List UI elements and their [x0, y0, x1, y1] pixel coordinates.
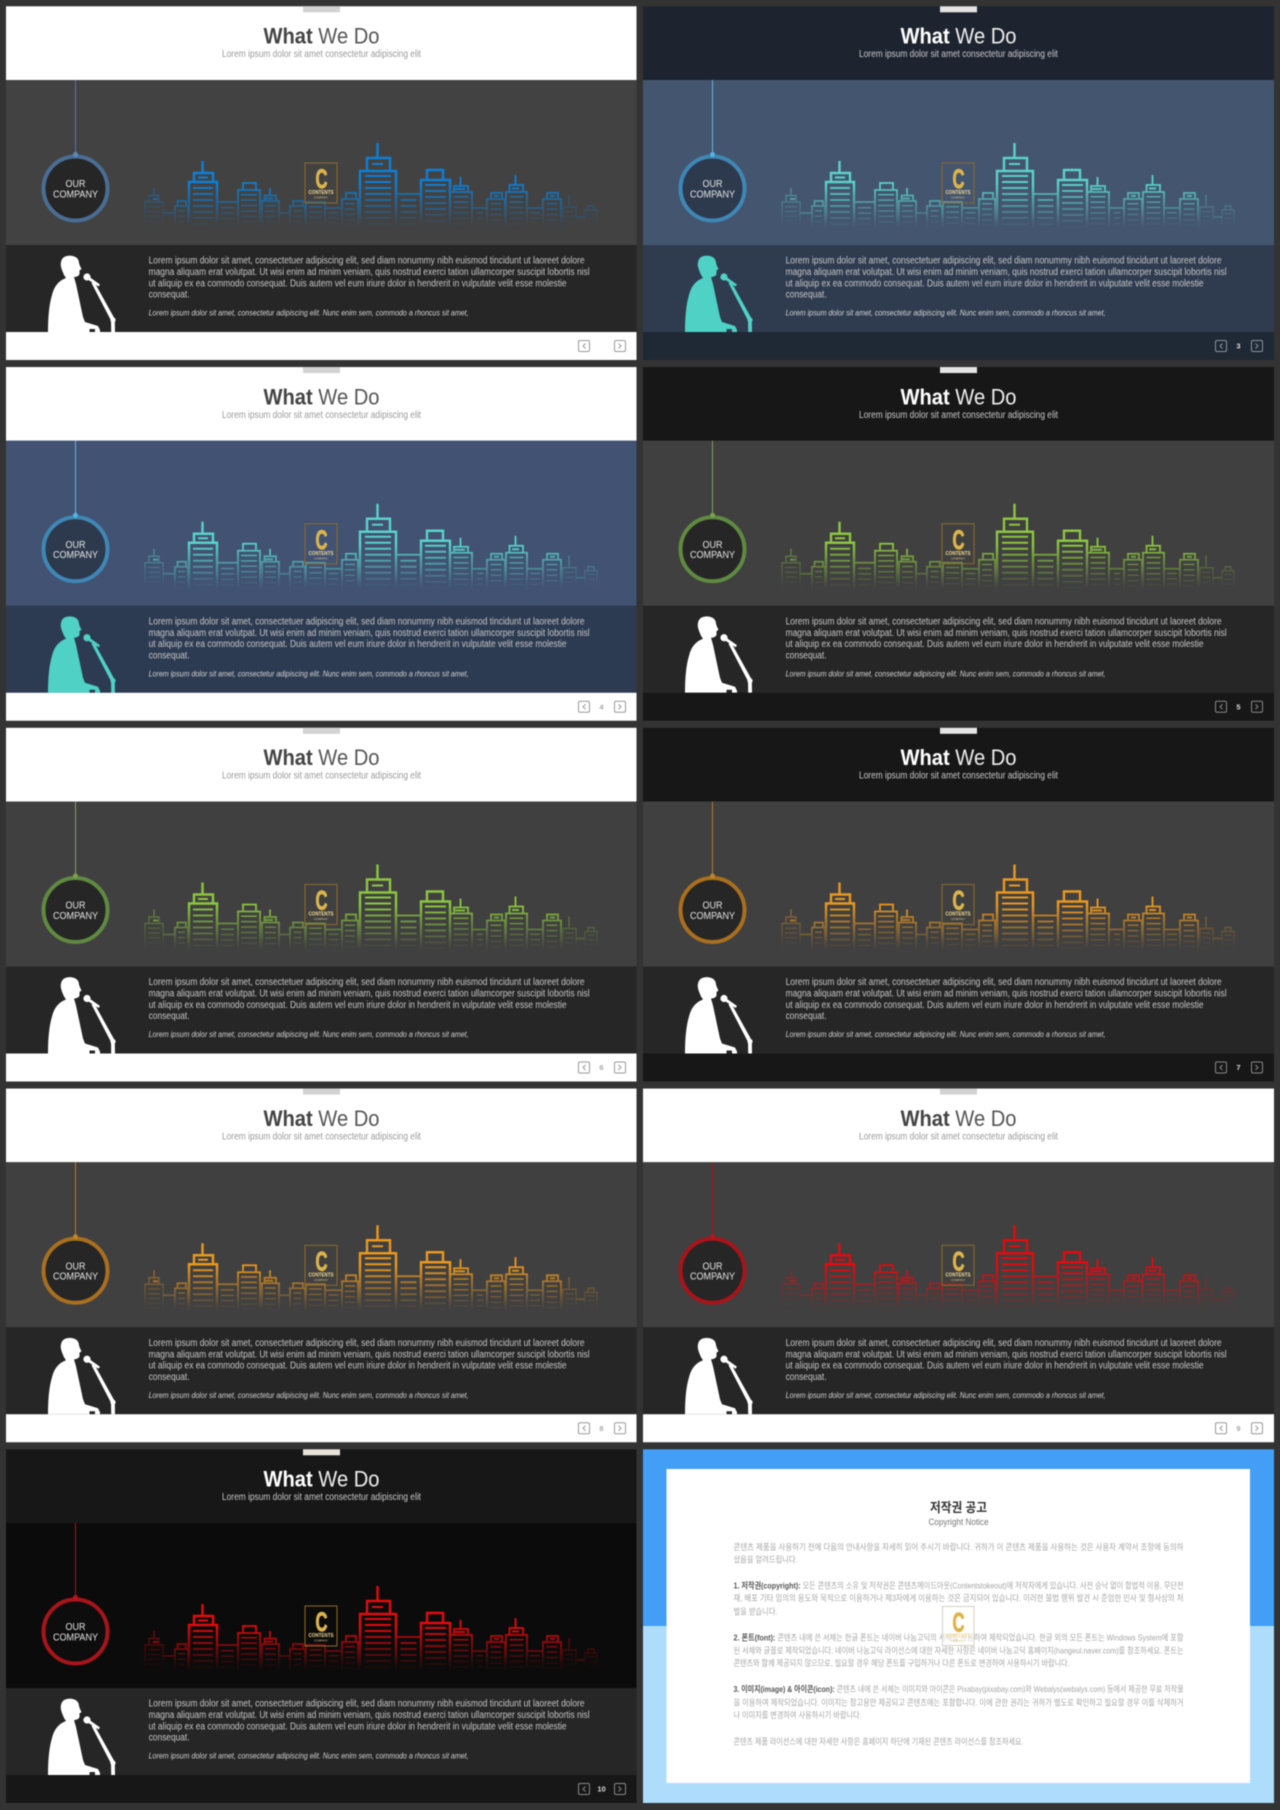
logo: CONTENTS [308, 551, 334, 557]
body text [786, 977, 1227, 1039]
watermark logo: C [952, 1608, 964, 1638]
body text: magna aliquam erat volutpat. Ut wisi enim ad minim veniam, quis nostrud exerci tation ullamcorper suscipit lobortis nisl [149, 1349, 590, 1360]
our company pendant [44, 1162, 108, 1303]
pager: 6 [599, 1063, 604, 1072]
subtitle: Lorem ipsum dolor sit amet consectetur adipiscing elit [222, 1492, 421, 1503]
white notice card [666, 1469, 1250, 1783]
paragraph 2: font: 2. 폰트(font): 콘텐츠 내에 쓴 서체는 한글 폰트는 네이버 나눔고딕의 서체를 사용하여 제작되었습니다. 한글 외의 모든 폰트는 Windows System에 포함 [734, 1633, 1184, 1643]
our company pendant: COMPANY [690, 550, 735, 561]
text band [6, 245, 636, 332]
body text: ut aliquip ex ea commodo consequat. Duis autem vel eum iriure dolor in hendrerit in vulputate velit esse molestie [786, 278, 1204, 289]
our company pendant [680, 1162, 744, 1303]
paragraph 1: copyright: 재, 배포 기타 임의의 용도와 목적으로 이용하거나 제3자에게 이용하는 것은 금지되어 있습니다. 이러한 불법 행위 발견 시 준엄한 민사 및 형사상의 처 [734, 1593, 1184, 1603]
logo [942, 524, 974, 564]
blue background upper [643, 1449, 1274, 1626]
body text: Lorem ipsum dolor sit amet, consectetur adipiscing elit. Nunc enim sem, commodo a rhoncus sit amet, [149, 668, 469, 678]
body text: magna aliquam erat volutpat. Ut wisi enim ad minim veniam, quis nostrud exerci tation ullamcorper suscipit lobortis nisl [149, 267, 590, 278]
speaker silhouette [48, 616, 116, 693]
logo: COMPANY [951, 196, 965, 200]
our company pendant [44, 80, 108, 220]
logo: C [316, 1246, 328, 1276]
title: What We Do [264, 1466, 380, 1492]
city band [6, 1162, 636, 1327]
skyline [782, 143, 1234, 232]
our company pendant: OUR [702, 1261, 722, 1272]
our company pendant: OUR [702, 540, 722, 551]
text band [643, 606, 1274, 693]
pager [578, 1784, 626, 1794]
watermark logo [942, 1606, 974, 1646]
our company pendant: COMPANY [690, 1272, 735, 1283]
pager [578, 340, 626, 352]
body text: Lorem ipsum dolor sit amet, consectetur adipiscing elit. Nunc enim sem, commodo a rhoncus sit amet, [149, 1750, 469, 1760]
closing line: 콘텐츠 제품 라이선스에 대한 자세한 사항은 홈페이지 하단에 기재된 콘텐츠 라이선스를 참조하세요. [734, 1737, 1024, 1747]
city band [6, 802, 636, 966]
subtitle: Lorem ipsum dolor sit amet consectetur adipiscing elit [222, 49, 421, 60]
our company pendant [680, 80, 744, 220]
footer [643, 1414, 1274, 1442]
speaker silhouette [48, 1699, 116, 1775]
subtitle: Lorem ipsum dolor sit amet consectetur adipiscing elit [859, 770, 1058, 782]
body text [786, 256, 1227, 318]
city band [643, 441, 1274, 606]
paragraph 3: images and icons: 나 이미지를 변경하여 사용하시기 바랍니다. [734, 1710, 862, 1720]
our company pendant [44, 441, 108, 581]
subtitle: Lorem ipsum dolor sit amet consectetur adipiscing elit [859, 410, 1058, 421]
speaker silhouette [685, 1338, 753, 1414]
subtitle: Lorem ipsum dolor sit amet consectetur adipiscing elit [222, 770, 421, 782]
logo: COMPANY [951, 556, 965, 560]
speaker silhouette [685, 256, 753, 332]
our company pendant: OUR [66, 1261, 86, 1272]
notice subtitle: Copyright Notice [928, 1517, 988, 1527]
pager [578, 701, 626, 712]
paragraph 1: copyright: 벌을 받습니다. [734, 1607, 778, 1617]
our company pendant: COMPANY [690, 189, 735, 200]
logo [942, 884, 974, 924]
logo: COMPANY [951, 1278, 965, 1282]
pager [1216, 1062, 1262, 1073]
body text: ut aliquip ex ea commodo consequat. Duis autem vel eum iriure dolor in hendrerit in vulputate velit esse molestie [149, 639, 567, 650]
footer [6, 1414, 636, 1442]
city band [6, 1523, 636, 1688]
title: What We Do [900, 24, 1016, 48]
logo: CONTENTS [946, 1272, 971, 1278]
logo: C [952, 1246, 964, 1276]
body text: consequat. [786, 1011, 827, 1022]
logo: COMPANY [314, 556, 328, 560]
footer [643, 693, 1274, 721]
text band [643, 1327, 1274, 1414]
city band [643, 1162, 1274, 1327]
pager: 7 [1236, 1063, 1241, 1072]
slide 5: green skyline on black header [643, 367, 1274, 721]
body text: consequat. [149, 1372, 190, 1383]
body text [149, 1338, 590, 1400]
logo: COMPANY [951, 917, 965, 921]
logo: CONTENTS [308, 1272, 334, 1278]
slide 7: orange skyline on black header [643, 728, 1274, 1082]
text band [6, 1327, 636, 1414]
skyline [145, 864, 597, 954]
logo: CONTENTS [946, 551, 971, 557]
subtitle: Lorem ipsum dolor sit amet consectetur adipiscing elit [859, 49, 1058, 60]
body text: consequat. [149, 290, 190, 301]
body text: ut aliquip ex ea commodo consequat. Duis autem vel eum iriure dolor in hendrerit in vulputate velit esse molestie [149, 1000, 567, 1011]
logo [942, 1245, 974, 1285]
text band [6, 1688, 636, 1775]
our company pendant: COMPANY [53, 911, 98, 922]
text band [6, 606, 636, 693]
slide 11: copyright notice [643, 1449, 1274, 1803]
city band [643, 802, 1274, 966]
body text: consequat. [786, 1372, 827, 1383]
city band [643, 80, 1274, 245]
body text: ut aliquip ex ea commodo consequat. Duis autem vel eum iriure dolor in hendrerit in vulputate velit esse molestie [149, 1721, 567, 1732]
logo: C [316, 164, 328, 194]
slide 8: orange skyline with white header [6, 1089, 636, 1442]
body text: magna aliquam erat volutpat. Ut wisi enim ad minim veniam, quis nostrud exerci tation ullamcorper suscipit lobortis nisl [149, 628, 590, 639]
logo: CONTENTS [308, 190, 334, 196]
our company pendant: OUR [66, 1622, 86, 1633]
paragraph 3: images and icons: 을 이용하여 제작되었습니다. 이미지는 참고용만 제공되고 콘텐츠에는 포함합니다. 이에 관한 권리는 귀하가 별도로 확인하고 필요할 경우 이를 삭제하거 [734, 1698, 1184, 1708]
body text: ut aliquip ex ea commodo consequat. Duis autem vel eum iriure dolor in hendrerit in vulputate velit esse molestie [786, 639, 1204, 650]
body text: ut aliquip ex ea commodo consequat. Duis autem vel eum iriure dolor in hendrerit in vulputate velit esse molestie [149, 1361, 567, 1372]
logo: C [316, 1607, 328, 1637]
slide 6: green skyline with white header [6, 728, 636, 1082]
header band [6, 6, 636, 80]
logo: COMPANY [314, 917, 328, 921]
pager: 8 [599, 1424, 604, 1433]
body text [149, 977, 590, 1039]
our company pendant: OUR [66, 900, 86, 912]
paragraph 3: images and icons: 3. 이미지(image) & 아이콘(icon): 콘텐츠 내에 쓴 서체는 이미지와 아이콘은 Pixabay(pixabay.com)와 Webalys(webalys.com) 등에서 제공한 무료 저작물 [734, 1684, 1184, 1694]
our company pendant [44, 802, 108, 942]
body text: consequat. [149, 1011, 190, 1022]
city band [6, 441, 636, 606]
skyline [145, 1225, 597, 1314]
header band [6, 728, 636, 802]
our company pendant: COMPANY [53, 189, 98, 200]
logo: CONTENTS [308, 1633, 334, 1639]
body text: Lorem ipsum dolor sit amet, consectetur adipiscing elit. Nunc enim sem, commodo a rhoncus sit amet, [786, 308, 1106, 318]
body text: Lorem ipsum dolor sit amet, consectetuer adipiscing elit, sed diam nonummy nibh euismod tincidunt ut laoreet dolore [149, 616, 585, 627]
paragraph 3: images and icons [734, 1684, 1184, 1720]
text band [643, 245, 1274, 332]
notice title: 저작권 공고 [930, 1500, 987, 1515]
logo [305, 884, 337, 924]
title: What We Do [900, 1106, 1016, 1131]
pager [1216, 1423, 1262, 1434]
title: What We Do [264, 24, 380, 48]
logo [942, 163, 974, 203]
footer [6, 332, 636, 360]
skyline [145, 1586, 597, 1675]
body text [149, 616, 590, 678]
title: What We Do [264, 384, 380, 409]
body text: ut aliquip ex ea commodo consequat. Duis autem vel eum iriure dolor in hendrerit in vulputate velit esse molestie [149, 278, 567, 289]
pager [1216, 701, 1262, 712]
body text [149, 1699, 590, 1760]
subtitle: Lorem ipsum dolor sit amet consectetur adipiscing elit [859, 1131, 1058, 1142]
footer [6, 1775, 636, 1803]
logo: COMPANY [314, 1278, 328, 1282]
pager: 10 [597, 1784, 606, 1794]
header band [643, 6, 1274, 80]
logo: C [316, 886, 328, 916]
our company pendant: OUR [702, 179, 722, 190]
body text: Lorem ipsum dolor sit amet, consectetuer adipiscing elit, sed diam nonummy nibh euismod tincidunt ut laoreet dolore [149, 1338, 585, 1349]
text band [6, 966, 636, 1054]
speaker silhouette [685, 616, 753, 693]
blue background lower [643, 1626, 1274, 1803]
paragraph 2: font [734, 1633, 1184, 1668]
our company pendant: OUR [66, 540, 86, 551]
header band [643, 728, 1274, 802]
pager [1216, 340, 1262, 352]
title: What We Do [900, 745, 1016, 770]
body text: ut aliquip ex ea commodo consequat. Duis autem vel eum iriure dolor in hendrerit in vulputate velit esse molestie [786, 1000, 1204, 1011]
speaker silhouette [685, 977, 753, 1054]
body text: Lorem ipsum dolor sit amet, consectetuer adipiscing elit, sed diam nonummy nibh euismod tincidunt ut laoreet dolore [149, 256, 585, 267]
pager [578, 1062, 626, 1073]
footer [643, 1054, 1274, 1082]
body text: Lorem ipsum dolor sit amet, consectetuer adipiscing elit, sed diam nonummy nibh euismod tincidunt ut laoreet dolore [149, 1699, 585, 1710]
city band [6, 80, 636, 245]
pager: 9 [1236, 1424, 1241, 1433]
header band [6, 1449, 636, 1523]
text band [643, 966, 1274, 1054]
our company pendant: COMPANY [53, 550, 98, 561]
skyline [782, 864, 1234, 954]
our company pendant [680, 802, 744, 942]
title: What We Do [900, 384, 1016, 409]
intro paragraph: 콘텐츠 제품을 사용하기 전에 다음의 안내사항을 자세히 읽어 주시기 바랍니다. 귀하가 이 콘텐츠 제품을 사용하는 것은 사용자 계약서 조항에 동의하 [734, 1542, 1184, 1552]
header band [6, 1089, 636, 1162]
logo: CONTENTS [946, 190, 971, 196]
logo: C [952, 886, 964, 916]
logo: C [952, 525, 964, 555]
body text: consequat. [149, 1733, 190, 1744]
speaker silhouette [48, 977, 116, 1054]
footer [6, 1054, 636, 1082]
paragraph 1: copyright [734, 1581, 1184, 1617]
logo [305, 1245, 337, 1285]
speaker silhouette [48, 1338, 116, 1414]
skyline [145, 143, 597, 232]
paragraph 1: copyright: 1. 저작권(copyright): 모든 콘텐츠의 소유 및 저작권은 콘텐츠메이드아웃(Contentstokeout)에 저작자에게 있습니다. 사전 승낙 없이 합법적 이용, 무단전 [734, 1581, 1184, 1591]
logo [305, 1606, 337, 1646]
body text: Lorem ipsum dolor sit amet, consectetur adipiscing elit. Nunc enim sem, commodo a rhoncus sit amet, [786, 668, 1106, 678]
body text: consequat. [786, 650, 827, 661]
paragraph 2: font: 된 서체와 글꼴로 제작되었습니다. 네이버 나눔고딕 라이선스에 대한 자세한 사항은 네이버 나눔고딕 홈페이지(hangeul.naver.com)를 참조하세요. 폰트는 [734, 1646, 1184, 1656]
body text: Lorem ipsum dolor sit amet, consectetur adipiscing elit. Nunc enim sem, commodo a rhoncus sit amet, [149, 1029, 469, 1039]
body text: ut aliquip ex ea commodo consequat. Duis autem vel eum iriure dolor in hendrerit in vulputate velit esse molestie [786, 1361, 1204, 1372]
slide 10: red skyline on black [6, 1449, 636, 1803]
watermark logo: COMPANY [951, 1639, 965, 1643]
logo [305, 524, 337, 564]
body text: Lorem ipsum dolor sit amet, consectetur adipiscing elit. Nunc enim sem, commodo a rhoncus sit amet, [786, 1029, 1106, 1039]
logo: CONTENTS [308, 912, 334, 918]
logo: COMPANY [314, 196, 328, 200]
body text: Lorem ipsum dolor sit amet, consectetur adipiscing elit. Nunc enim sem, commodo a rhoncus sit amet, [149, 1390, 469, 1400]
title: What We Do [264, 1106, 380, 1131]
body text [786, 1338, 1227, 1400]
body text: consequat. [786, 290, 827, 301]
intro paragraph [734, 1542, 1184, 1565]
our company pendant: COMPANY [53, 1272, 98, 1283]
header band [643, 367, 1274, 441]
body text: Lorem ipsum dolor sit amet, consectetur adipiscing elit. Nunc enim sem, commodo a rhoncus sit amet, [786, 1390, 1106, 1400]
slide 2: blue skyline on white [6, 6, 636, 360]
our company pendant: COMPANY [690, 911, 735, 922]
logo: COMPANY [314, 1638, 328, 1642]
our company pendant [680, 441, 744, 581]
slide 4: teal skyline with white header [6, 367, 636, 721]
logo [305, 163, 337, 203]
pager [578, 1423, 626, 1434]
subtitle: Lorem ipsum dolor sit amet consectetur adipiscing elit [222, 1131, 421, 1142]
our company pendant: OUR [702, 900, 722, 912]
skyline [145, 504, 597, 593]
body text: Lorem ipsum dolor sit amet, consectetuer adipiscing elit, sed diam nonummy nibh euismod tincidunt ut laoreet dolore [149, 977, 585, 988]
intro paragraph: 셨음을 알려드립니다. [734, 1555, 798, 1565]
slide 9: red skyline with white header [643, 1089, 1274, 1442]
slide 3: teal skyline on navy [643, 6, 1274, 360]
logo: CONTENTS [946, 912, 971, 918]
speaker silhouette [48, 256, 116, 332]
body text: magna aliquam erat volutpat. Ut wisi enim ad minim veniam, quis nostrud exerci tation ullamcorper suscipit lobortis nisl [149, 1710, 590, 1721]
our company pendant [44, 1523, 108, 1664]
our company pendant: OUR [66, 179, 86, 190]
pager: 4 [599, 702, 604, 711]
skyline [782, 1225, 1234, 1314]
skyline [782, 504, 1234, 593]
body text: magna aliquam erat volutpat. Ut wisi enim ad minim veniam, quis nostrud exerci tation ullamcorper suscipit lobortis nisl [149, 988, 590, 1000]
header band [643, 1089, 1274, 1162]
logo: C [952, 164, 964, 194]
our company pendant: COMPANY [53, 1632, 98, 1643]
body text [149, 256, 590, 318]
pager: 5 [1236, 702, 1241, 711]
pager: 3 [1236, 342, 1241, 350]
body text: consequat. [149, 650, 190, 661]
footer [643, 332, 1274, 360]
logo: C [316, 525, 328, 555]
body text [786, 616, 1227, 678]
header band [6, 367, 636, 441]
paragraph 2: font: 콘텐츠와 함께 제공되지 않으므로, 필요할 경우 해당 폰트를 구입하거나 다른 폰트로 변경하여 사용하시기 바랍니다. [734, 1658, 1070, 1668]
subtitle: Lorem ipsum dolor sit amet consectetur adipiscing elit [222, 410, 421, 421]
footer [6, 693, 636, 721]
watermark logo: CONTENTS [946, 1634, 971, 1640]
title: What We Do [264, 745, 380, 770]
body text: Lorem ipsum dolor sit amet, consectetur adipiscing elit. Nunc enim sem, commodo a rhoncus sit amet, [149, 308, 469, 318]
